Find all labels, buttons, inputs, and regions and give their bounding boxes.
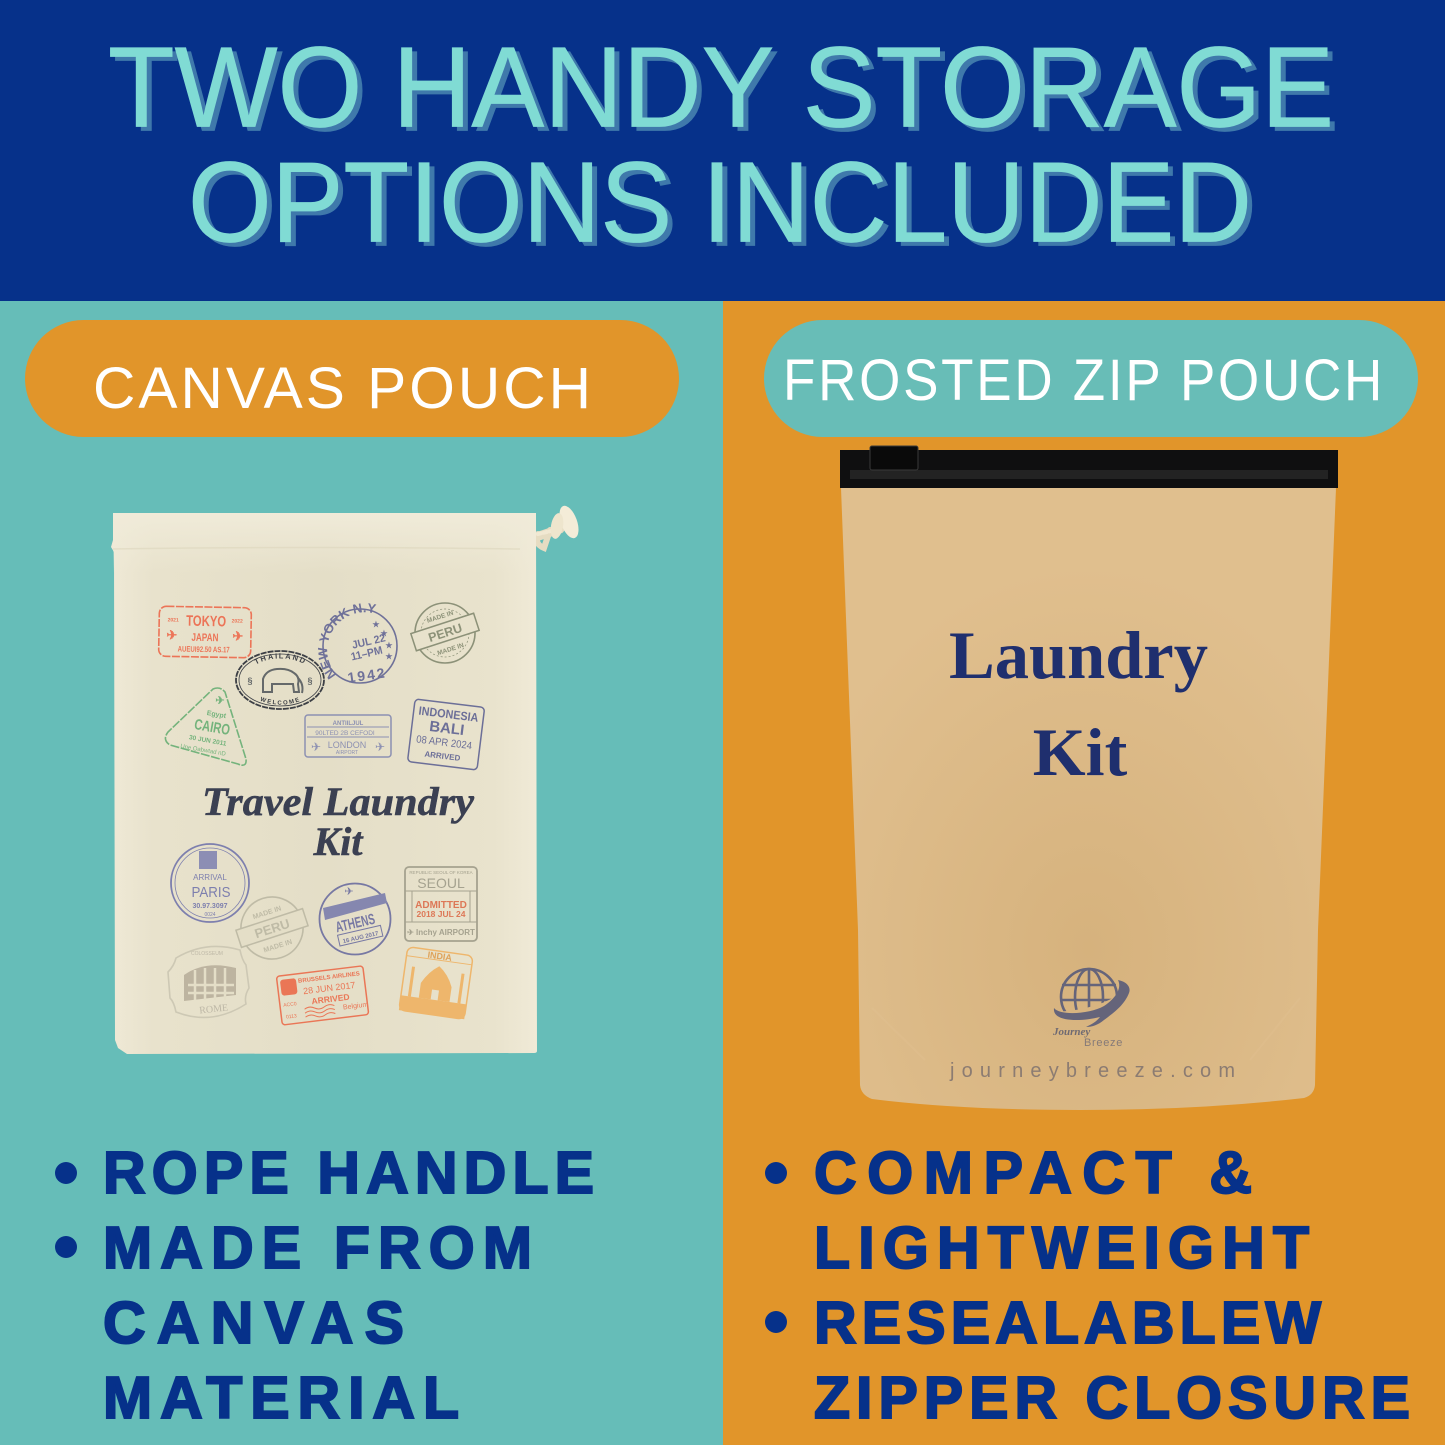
stamp: London: 90LTED 2B CEFODI: [315, 730, 375, 737]
stamp: Seoul: 2018 JUL 24: [416, 909, 466, 919]
rope handle: [524, 503, 582, 548]
stamp: Athens: ATHENS: [334, 911, 377, 936]
stamp: Peru green: PERU: [427, 621, 464, 645]
stamp: London: ✈: [311, 740, 321, 754]
stamp: Bali: 08 APR 2024: [416, 733, 473, 752]
icon: elephant: [263, 669, 299, 692]
stamp: Tokyo: [159, 606, 251, 658]
stamp: Peru grey: MADE IN: [263, 939, 293, 954]
icon: Journey Breeze globe logo: [1052, 969, 1130, 1049]
title: [108, 24, 1339, 270]
stamp: London: ✈: [375, 740, 385, 754]
icon: Journey Breeze globe logo: Journey: [1052, 1026, 1090, 1038]
stamp: Cairo: Une Oabwtad nD: [180, 744, 227, 758]
stamp: New York: ★: [372, 620, 380, 629]
bag label: Travel Laundry Kit: Travel Laundry: [202, 779, 474, 824]
stamp: Athens: 16 AUG 2017: [342, 931, 380, 945]
stamp: Bali: ARRIVED: [424, 750, 461, 763]
stamp: Paris: 30.97.3097: [192, 903, 228, 910]
stamp: Rome: [168, 946, 249, 1017]
stamp: Brussels: 0113: [286, 1013, 297, 1021]
stamp: New York: 11–PM: [350, 645, 384, 663]
stamp: Peru green: MADE IN: [437, 642, 465, 657]
title: OPTIONS INCLUDED: [193, 144, 1257, 270]
title: TWO HANDY STORAGE: [113, 28, 1339, 156]
stamp: Peru grey: [229, 888, 315, 968]
stamp: India: INDIA: [427, 950, 453, 963]
frosted zip pouch heading pill: [764, 320, 1418, 437]
stamp: New York: ★: [385, 652, 393, 661]
stamp: London: LONDON: [328, 740, 366, 750]
stamp: Cairo: ✈: [215, 695, 225, 707]
stamp: Athens: [320, 884, 390, 954]
stamp: Thailand: §: [307, 676, 313, 686]
canvas pouch feature list: MADE FROM: [103, 1215, 532, 1281]
canvas pouch feature list: ROPE HANDLE: [103, 1140, 594, 1206]
stamp: London: AIRPORT: [336, 750, 358, 756]
stamp: Paris: PARIS: [192, 884, 230, 901]
stamp: Peru green: [408, 603, 483, 663]
stamp: Rome: COLOSSEUM: [191, 951, 223, 957]
canvas pouch feature list: [55, 1140, 594, 1431]
stamp: Rome: ROME: [199, 1003, 229, 1016]
stamp: Seoul: [405, 867, 477, 941]
bag label: Travel Laundry Kit: Kit: [313, 819, 364, 864]
stamp: India: [399, 947, 473, 1019]
zipper: [840, 446, 1338, 488]
stamp: Tokyo: JAPAN: [191, 632, 219, 644]
stamp: Tokyo: 2021: [168, 617, 179, 624]
pouch label: Laundry Kit: Kit: [1033, 714, 1128, 790]
stamp: New York: NEW YORK N.Y: [318, 603, 376, 680]
stamp: Brussels: ACC0: [283, 1001, 297, 1009]
stamp: New York: JUL 22: [351, 632, 387, 652]
panel: frosted zip pouch background: [723, 301, 1445, 1445]
stamp: London: [305, 715, 391, 757]
stamp: London: ANTIILJUL: [333, 721, 364, 727]
stamp: Brussels: BRUSSELS AIRLINES: [298, 971, 360, 985]
stamp: Seoul: ADMITTED: [415, 900, 467, 911]
stamp: Thailand: §: [247, 676, 253, 686]
stamp: New York: [318, 603, 398, 686]
stamp: Cairo: Egypt: [206, 710, 227, 720]
stamp: Paris: ARRIVAL: [193, 873, 227, 882]
pouch label: Laundry Kit: Laundry: [949, 617, 1208, 693]
stamp: Brussels: ARRIVED: [311, 992, 350, 1006]
canvas drawstring bag: [111, 506, 578, 1054]
stamp: New York: 1942: [346, 664, 388, 686]
stamp: Bali: [407, 699, 485, 770]
panel: header band: [0, 0, 1445, 301]
stamp: Thailand: THAILAND: [254, 653, 305, 664]
stamp: Brussels: 28 JUN 2017: [303, 980, 356, 996]
frosted zip pouch feature list: ZIPPER CLOSURE: [814, 1365, 1410, 1431]
stamp: Seoul: ✈ Inchy AIRPORT: [407, 928, 475, 937]
stamp: Cairo: 30 JUN 2011: [188, 734, 227, 748]
stamp: Thailand: WELCOME: [260, 696, 300, 705]
stamp: Bali: BALI: [428, 718, 465, 739]
stamp: Paris: [171, 844, 249, 922]
stamp: Paris: 0024: [204, 912, 216, 918]
website address: journeybreeze.com: [949, 1060, 1235, 1082]
stamp: Peru grey: PERU: [253, 916, 292, 941]
frosted zip pouch feature list: RESEALABLEW: [814, 1290, 1321, 1356]
canvas pouch feature list: MATERIAL: [103, 1365, 459, 1431]
title: TWO HANDY STORAGE: [108, 24, 1334, 152]
stamp: Thailand: [235, 650, 325, 710]
bag label: Travel Laundry Kit: [202, 779, 474, 864]
stamp: Tokyo: ✈: [166, 627, 178, 643]
stamp: Tokyo: 2022: [232, 618, 243, 625]
icon: Journey Breeze globe logo: Breeze: [1084, 1037, 1123, 1049]
frosted zip pouch: [840, 446, 1338, 1110]
stamp: Brussels: Belgium: [343, 1001, 369, 1012]
stamp: Bali: INDONESIA: [418, 704, 479, 725]
canvas pouch heading pill: [25, 320, 679, 437]
stamp: Seoul: SEOUL: [417, 875, 465, 891]
stamp: Peru grey: MADE IN: [252, 905, 282, 921]
stamp: Cairo: CAIRO: [193, 716, 232, 739]
frosted zip pouch feature list: [765, 1140, 1410, 1431]
stamp: Peru green: MADE IN: [426, 610, 455, 625]
stamp: Tokyo: TOKYO: [186, 613, 227, 630]
stamp: Tokyo: AUEUI92.50 AS.17: [178, 645, 230, 654]
frosted zip pouch feature list: LIGHTWEIGHT: [814, 1215, 1309, 1281]
canvas pouch feature list: CANVAS: [103, 1290, 404, 1356]
frosted zip pouch feature list: COMPACT &: [814, 1140, 1252, 1206]
stamp: Brussels: [276, 966, 370, 1025]
stamp: Seoul: REPUBLIC SEOUL OF KOREA: [409, 870, 473, 875]
frosted zip pouch heading pill: FROSTED ZIP POUCH: [783, 348, 1385, 413]
stamp: New York: ★: [385, 641, 393, 650]
panel: canvas pouch background: [0, 301, 723, 1445]
stamp: New York: ★: [380, 629, 388, 638]
canvas pouch heading pill: CANVAS POUCH: [93, 356, 594, 421]
pouch label: Laundry Kit: [949, 617, 1208, 790]
stamp: Cairo: [165, 688, 246, 765]
title: OPTIONS INCLUDED: [188, 140, 1252, 266]
stamp: Athens: ✈: [344, 886, 354, 898]
stamp: Tokyo: ✈: [232, 628, 244, 644]
